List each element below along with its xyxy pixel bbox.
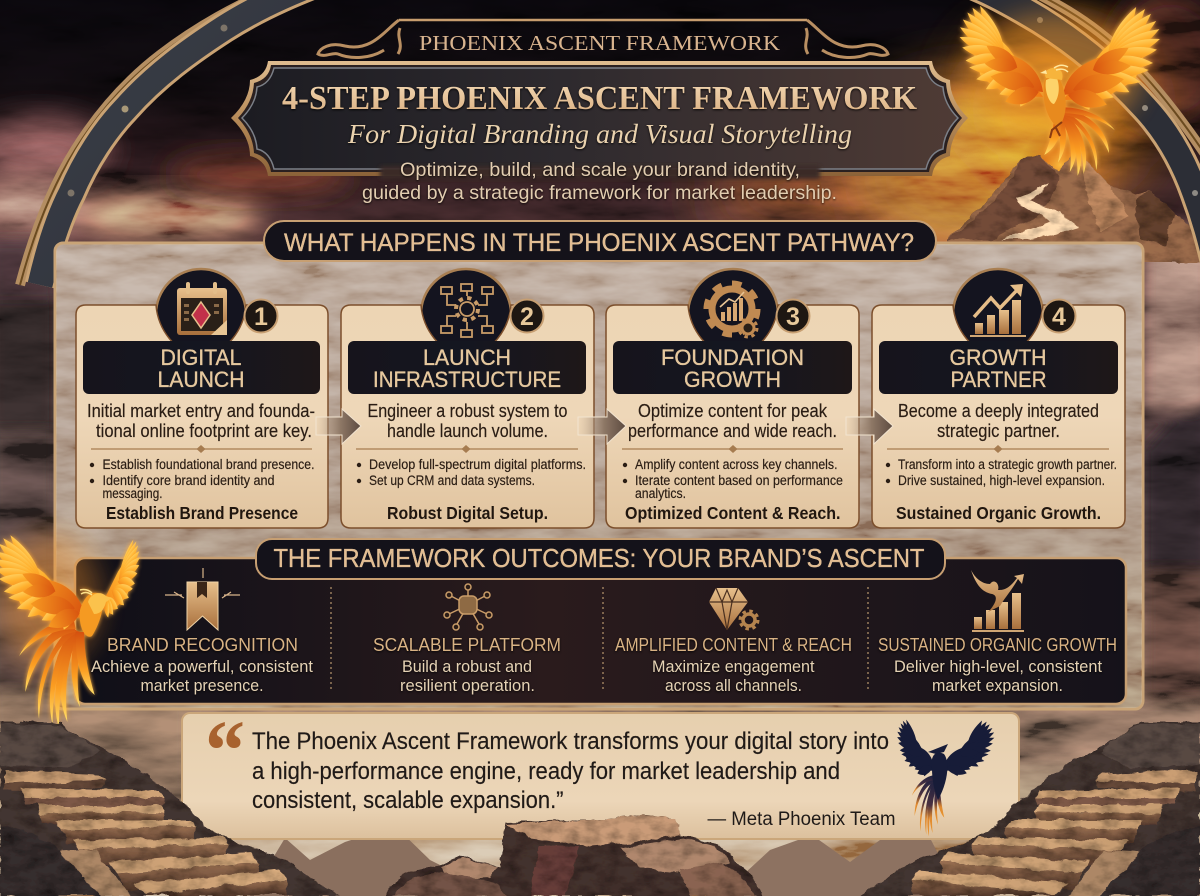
icon: dark phoenix (896, 718, 996, 836)
number badge 1 (244, 300, 278, 332)
icon: gem and gear (709, 588, 758, 630)
outcome text 1 (91, 635, 313, 695)
icon circle: step 2 network gear (421, 269, 511, 359)
attribution: — Meta Phoenix Team (708, 809, 896, 830)
title bar: DIGITAL (160, 345, 242, 370)
arrow: step 1 to 2 (316, 409, 361, 444)
title plaque (231, 61, 968, 179)
panel: step 1 Digital Launch (76, 305, 328, 528)
outcome text 4: SUSTAINED ORGANIC GROWTH (878, 635, 1117, 655)
bullet list: Set up CRM and data systems. (369, 473, 535, 488)
tagline: Optimize, build, and scale your brand identity, (400, 159, 800, 181)
bullet list: Develop full-spectrum digital platforms. (369, 457, 586, 472)
quote text: a high-performance engine, ready for market leadership and (252, 758, 840, 785)
quote callout (182, 702, 1019, 839)
number badge 2: 2 (520, 303, 534, 331)
tagline: guided by a strategic framework for market leadership. (362, 182, 837, 204)
bullet list: Drive sustained, high-level expansion. (898, 473, 1105, 488)
bullet list: Amplify content across key channels. (635, 457, 838, 472)
bullet list: Establish foundational brand presence. (102, 457, 314, 472)
description: Initial market entry and founda- (87, 400, 315, 421)
outcome text 4: market expansion. (932, 677, 1063, 695)
number badge 2 (510, 300, 544, 332)
number badge 3 (776, 300, 810, 332)
outcome text 2: SCALABLE PLATFORM (373, 635, 561, 655)
icon: phoenix growth chart (971, 570, 1024, 632)
title bar (613, 341, 852, 394)
arrow: step 2 to 3 (578, 409, 626, 444)
divider (356, 445, 578, 453)
outcome text 1: BRAND RECOGNITION (107, 635, 298, 655)
foreground rocks: center outcrop (384, 816, 762, 896)
divider (622, 445, 843, 453)
section heading pill: outcomes: THE FRAMEWORK OUTCOMES: YOUR BRAND’S ASCENT (274, 543, 925, 573)
outcome text 4: Deliver high-level, consistent (894, 658, 1102, 676)
title bar: PARTNER (950, 367, 1046, 392)
icon circle: step 1 calendar (156, 269, 246, 359)
number badge 4: 4 (1052, 303, 1066, 331)
outcome text 3 (615, 635, 852, 695)
foreground stairs: right (860, 722, 1200, 896)
description: strategic partner. (937, 420, 1060, 441)
description: Optimize content for peak (638, 400, 828, 421)
description: performance and wide reach. (628, 420, 837, 441)
bullet list: messaging. (102, 486, 162, 501)
description (368, 400, 568, 441)
divider (887, 445, 1109, 453)
description: Become a deeply integrated (898, 400, 1099, 421)
number badge 3: 3 (786, 303, 800, 331)
icon: bookmark (165, 568, 240, 630)
outcome text 2 (373, 635, 561, 695)
outcome text 1: Achieve a powerful, consistent (91, 658, 313, 676)
title bar (879, 341, 1118, 394)
panel: step 3 Foundation Growth (606, 305, 859, 528)
tagline (362, 159, 837, 204)
number badge 4 (1042, 300, 1076, 332)
description (898, 400, 1099, 441)
title bar (348, 341, 586, 394)
title bar: FOUNDATION (661, 345, 804, 370)
outcome text 1: market presence. (140, 677, 264, 695)
mountain peak under right phoenix (947, 129, 1200, 262)
quote text (252, 728, 889, 814)
panel: framework outcomes (75, 558, 1126, 704)
main title: 4-STEP PHOENIX ASCENT FRAMEWORK (282, 80, 918, 117)
icon circle: step 3 gear with chart (688, 269, 778, 359)
description: Engineer a robust system to (368, 400, 568, 421)
takeaway: Sustained Organic Growth. (896, 503, 1101, 523)
left phoenix on the rock (0, 523, 143, 728)
right phoenix rising from the peak (958, 3, 1162, 176)
takeaway: Optimized Content & Reach. (625, 503, 840, 523)
icon: network chip (444, 584, 492, 630)
title bar: INFRASTRUCTURE (373, 367, 561, 392)
quote text: The Phoenix Ascent Framework transforms your digital story into (252, 728, 889, 755)
subtitle: For Digital Branding and Visual Storytelling (347, 119, 852, 149)
icon: quotation mark: “ (205, 702, 245, 798)
bullet list (90, 457, 314, 501)
bullet list (357, 457, 586, 488)
icon circle: step 4 rising chart (953, 269, 1043, 359)
title bar: GROWTH (950, 345, 1046, 370)
bullet list: analytics. (635, 486, 686, 501)
section heading pill: pathway (264, 221, 936, 261)
section heading pill: pathway: WHAT HAPPENS IN THE PHOENIX ASCENT PATHWAY? (284, 229, 914, 257)
title bar: LAUNCH (158, 367, 244, 392)
bullet list: Identify core brand identity and (102, 473, 274, 488)
takeaway: Establish Brand Presence (106, 503, 298, 523)
number badge 1: 1 (254, 303, 268, 331)
outcome text 3: Maximize engagement (652, 658, 815, 676)
description: handle launch volume. (387, 420, 548, 441)
bullet list: Transform into a strategic growth partner. (898, 457, 1117, 472)
decorative arch frame (20, 0, 1200, 285)
bullet list (886, 457, 1117, 488)
arrow: step 3 to 4 (846, 409, 893, 444)
outcome text 4 (878, 635, 1117, 695)
parchment content panel (55, 243, 1143, 709)
description: tional online footprint are key. (96, 420, 312, 441)
bullet list (623, 457, 843, 501)
outcome text 3: AMPLIFIED CONTENT & REACH (615, 635, 852, 655)
foreground stairs: left (0, 722, 340, 896)
title bar: GROWTH (684, 367, 781, 392)
takeaway: Robust Digital Setup. (387, 503, 548, 523)
header ribbon: Phoenix Ascent Framework: PHOENIX ASCENT FRAMEWORK (419, 31, 780, 55)
description (628, 400, 837, 441)
header ribbon: Phoenix Ascent Framework (318, 20, 888, 57)
description (87, 400, 315, 441)
outcome text 2: Build a robust and (402, 658, 532, 676)
bullet list: Iterate content based on performance (635, 473, 843, 488)
title bar (83, 341, 320, 394)
title bar: LAUNCH (423, 345, 511, 370)
panel: step 4 Growth Partner (872, 305, 1125, 528)
outcome text 3: across all channels. (665, 677, 802, 695)
quote text: consistent, scalable expansion.” (252, 787, 564, 814)
outcome text 2: resilient operation. (400, 677, 535, 695)
panel: step 2 Launch Infrastructure (341, 305, 594, 528)
divider (91, 445, 312, 453)
